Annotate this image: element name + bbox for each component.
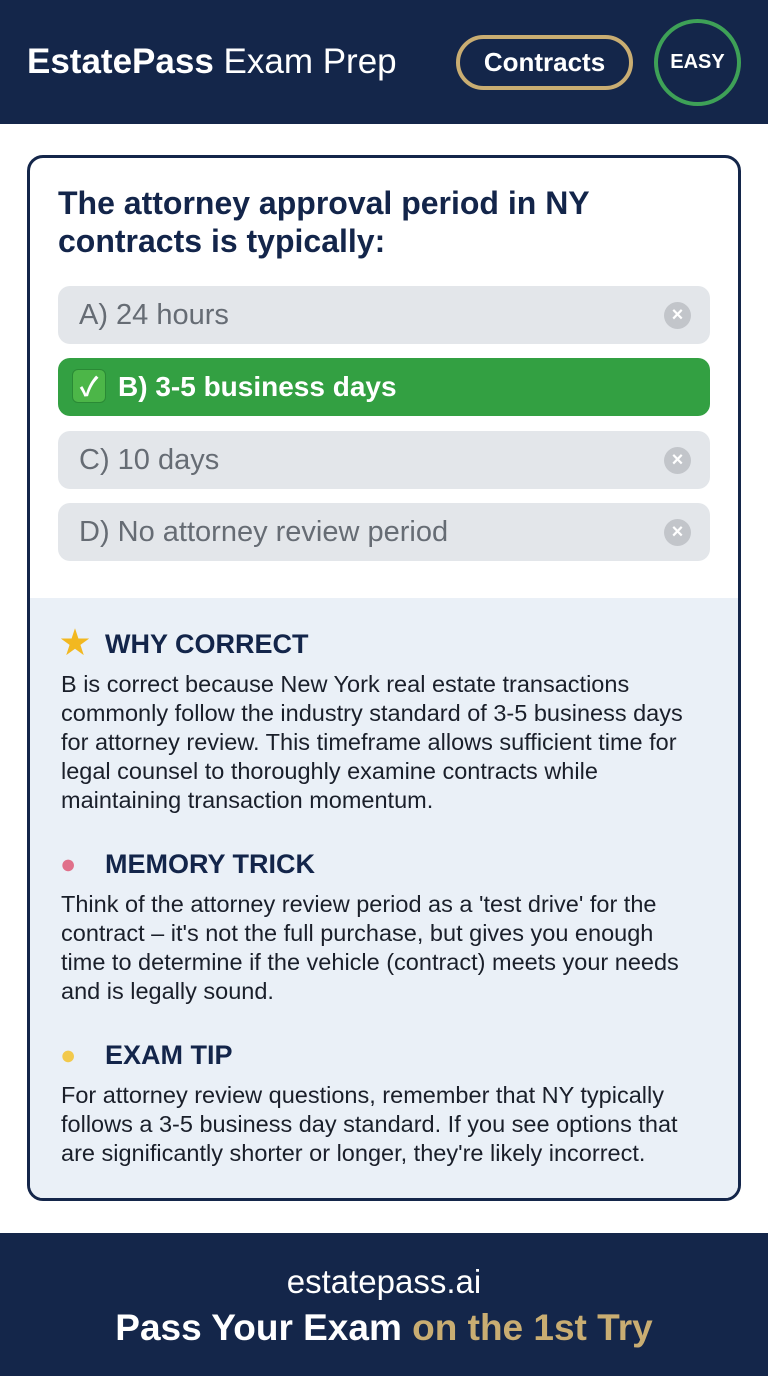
badge: contracts: Contracts	[484, 47, 605, 77]
heading: memory trick: MEMORY TRICK	[105, 849, 315, 879]
option C: C) 10 days	[79, 444, 219, 476]
badge: easy	[654, 19, 741, 106]
text: memory trick: time to determine if the vehicle (contract) meets your needs	[61, 949, 679, 975]
card	[27, 155, 741, 1201]
heading: exam tip: EXAM TIP	[105, 1040, 233, 1070]
text: memory trick: Think of the attorney review period as a 'test drive' for the	[61, 891, 656, 917]
option B correct: B) 3-5 business days	[118, 371, 397, 402]
question	[58, 185, 590, 259]
text: exam tip	[61, 1082, 678, 1166]
option D	[58, 503, 710, 561]
heading: exam tip: ●	[60, 1040, 76, 1070]
text: why correct	[61, 671, 683, 813]
footer	[0, 1233, 768, 1376]
text: memory trick	[61, 891, 679, 1004]
option A	[58, 286, 710, 344]
text: why correct: B is correct because New York real estate transactions	[61, 671, 629, 697]
option D: ×	[672, 521, 683, 543]
option B correct	[58, 358, 710, 416]
heading: memory trick: ●	[60, 849, 76, 879]
header	[0, 0, 768, 124]
badge: easy: EASY	[670, 51, 725, 73]
text: why correct: legal counsel to thoroughly examine contracts while	[61, 758, 598, 784]
text: memory trick: and is legally sound.	[61, 978, 274, 1004]
text: exam tip: follows a 3-5 business day standard. If you see options that	[61, 1111, 678, 1137]
footer url: estatepass.ai	[287, 1263, 481, 1300]
question: contracts is typically:	[58, 223, 385, 259]
text: exam tip: For attorney review questions, remember that NY typically	[61, 1082, 664, 1108]
title: EstatePass Exam Prep	[27, 42, 397, 81]
heading: why correct: ★	[60, 627, 90, 660]
option C: ×	[672, 449, 683, 471]
option D: D) No attorney review period	[79, 516, 448, 548]
option A: ×	[672, 304, 683, 326]
footer tagline: Pass Your Exam on the 1st Try	[115, 1307, 653, 1348]
heading: why correct: WHY CORRECT	[105, 629, 309, 659]
option C	[58, 431, 710, 489]
option A: A) 24 hours	[79, 299, 229, 331]
text: memory trick: contract – it's not the full purchase, but gives you enough	[61, 920, 653, 946]
text: why correct: maintaining transaction momentum.	[61, 787, 433, 813]
question: The attorney approval period in NY	[58, 185, 590, 221]
text: exam tip: are significantly shorter or longer, they're likely incorrect.	[61, 1140, 645, 1166]
badge: contracts	[456, 35, 633, 90]
text: why correct: for attorney review. This timeframe allows sufficient time for	[61, 729, 677, 755]
option B correct: ✓	[80, 372, 98, 402]
text: why correct: commonly follow the industry standard of 3-5 business days	[61, 700, 683, 726]
